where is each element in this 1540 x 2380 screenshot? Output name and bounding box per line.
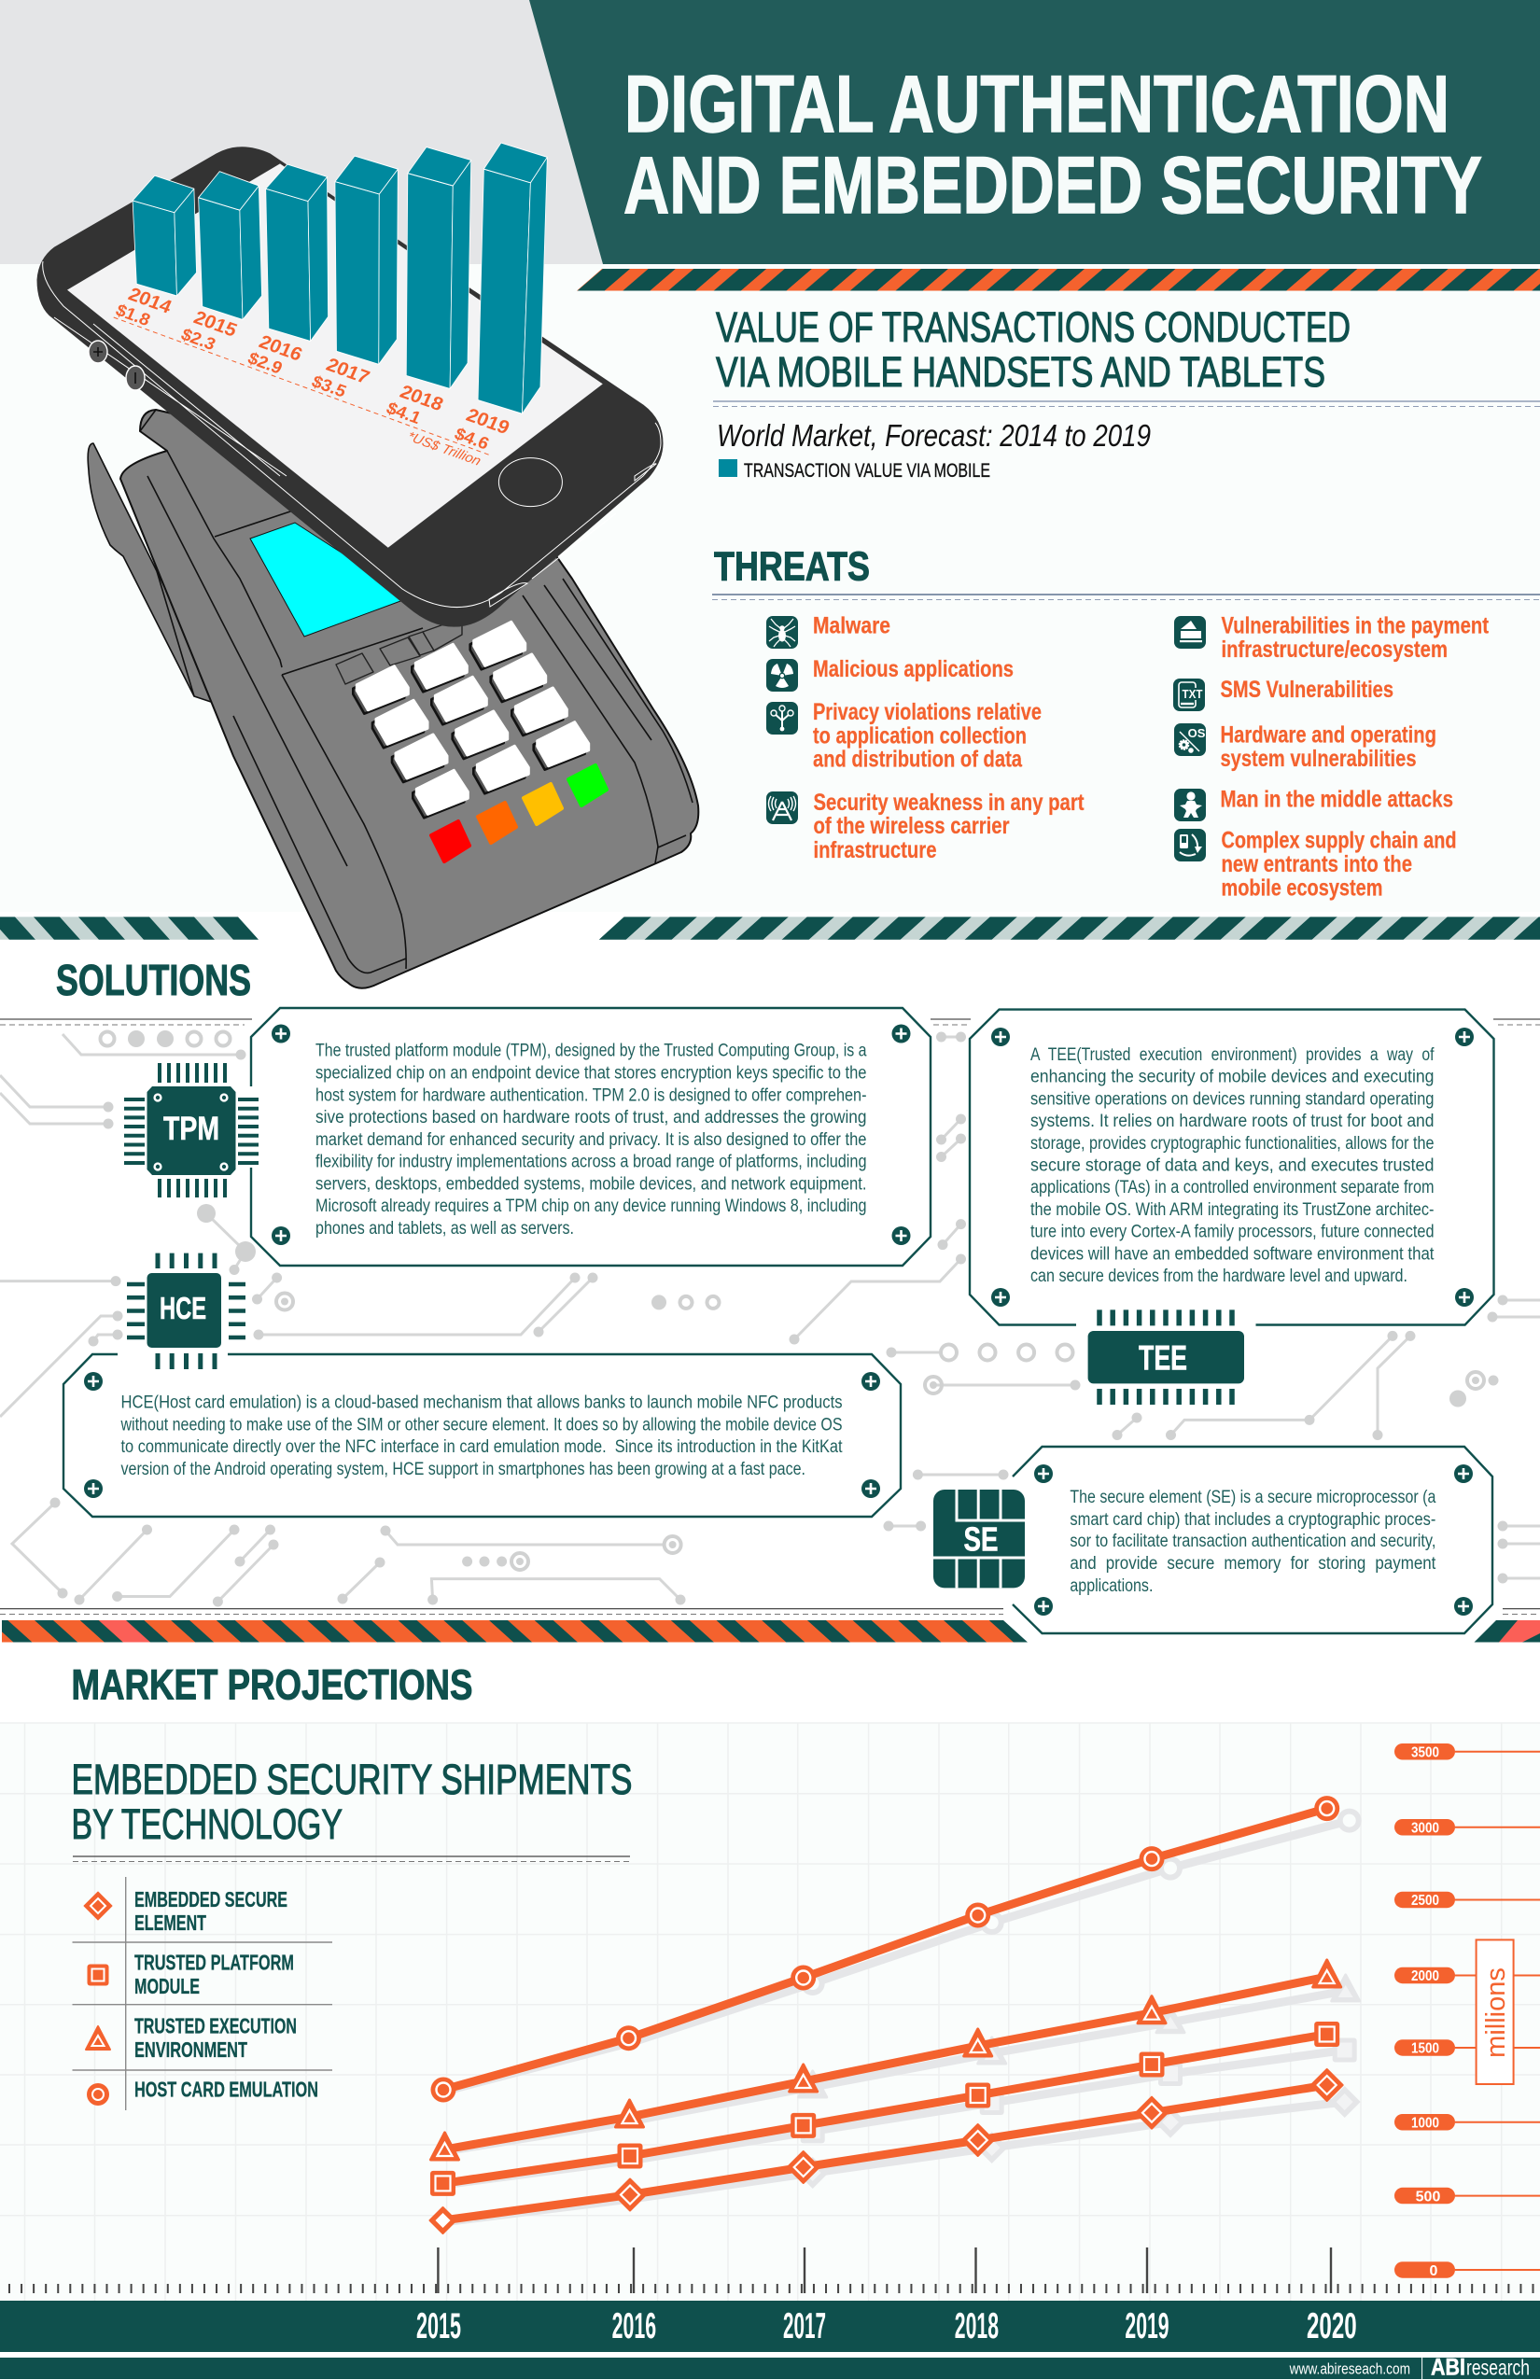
bar chart labels: 2015	[190, 307, 240, 341]
TEE description: enhancing the security of mobile devices and executing	[1030, 1068, 1434, 1086]
TEE description: sensitive operations on devices running standard operating	[1030, 1089, 1434, 1109]
terminal number keys	[353, 622, 589, 818]
y axis labels: 3500	[1411, 1745, 1439, 1760]
TPM description: flexibility for industry implementations across a broad range of platforms, including	[315, 1153, 866, 1172]
y axis labels: 0	[1430, 2263, 1438, 2279]
bar chart labels: 2014	[125, 284, 175, 318]
TEE description	[1030, 1045, 1435, 1286]
legend text: host card emulation: HOST CARD EMULATION	[134, 2078, 318, 2102]
legend icon: diamond	[84, 1892, 112, 1920]
TEE description: applications (TAs) in a controlled environment separate from	[1030, 1178, 1434, 1197]
threat text: SMS: SMS Vulnerabilities	[1221, 677, 1393, 703]
illustration: payment terminal	[88, 410, 698, 988]
bar chart labels: $3.5	[309, 371, 349, 400]
threat text: hardware and OS: Hardware and operating	[1221, 722, 1436, 749]
legend text: embedded secure element: ELEMENT	[134, 1911, 206, 1935]
TEE description: the mobile OS. With ARM integrating its TrustZone architec-	[1030, 1200, 1434, 1220]
y axis labels: 2500	[1411, 1893, 1439, 1909]
y axis unit box: millions	[1481, 1967, 1511, 2058]
chart gridlines	[0, 1723, 1540, 2301]
threat text: payment infrastructure: infrastructure/ecosystem	[1221, 637, 1448, 663]
icon: supply chain	[1174, 829, 1206, 861]
bar chart labels: $1.8	[113, 301, 153, 329]
bar chart labels: 2019	[463, 404, 512, 439]
y axis labels: 3000	[1411, 1820, 1439, 1837]
y axis labels: 2000	[1411, 1968, 1439, 1984]
threat text: wireless carrier	[814, 790, 1085, 863]
header banner with title	[529, 0, 1540, 264]
chart heading: VIA MOBILE HANDSETS AND TABLETS	[716, 348, 1325, 396]
icon: antenna tower	[766, 791, 798, 824]
bar chart labels: 2017	[323, 354, 372, 388]
icon: TEE chip	[1088, 1309, 1244, 1405]
bar chart labels: $4.1	[384, 399, 424, 427]
TEE description: secure storage of data and keys, and executes trusted	[1030, 1155, 1434, 1176]
TPM description	[315, 1042, 867, 1239]
y axis labels	[1394, 1743, 1540, 2279]
series: host card emulation	[431, 1796, 1339, 2102]
y axis labels: 1000	[1411, 2115, 1439, 2132]
bar chart labels: $4.6	[452, 424, 492, 453]
port and speaker details	[489, 464, 656, 607]
illustration: smartphone	[37, 143, 663, 627]
icon: TPM chip	[124, 1063, 259, 1197]
divider stripes above market projections	[2, 1620, 1540, 1643]
threat text: wireless carrier: of the wireless carrier	[814, 813, 1010, 839]
terminal function keys	[336, 618, 462, 684]
footer bar: www.abireseach.com	[1289, 2360, 1410, 2378]
panel: HCE	[63, 1354, 901, 1517]
SE description: and provide secure memory for storing payment	[1070, 1554, 1436, 1574]
volume buttons	[89, 341, 145, 390]
TEE description: storage, provides cryptographic functionalities, allows for the	[1030, 1134, 1434, 1154]
shipments chart heading: BY TECHNOLOGY	[71, 1800, 343, 1848]
chart shadows	[442, 1809, 1362, 2222]
x axis band with years: 2015	[416, 2306, 461, 2346]
icon: SE SIM chip: SE	[963, 1519, 999, 1559]
icon: radiation	[766, 659, 798, 692]
x axis band with years: 2020	[1307, 2306, 1357, 2346]
TPM description: host system for hardware authentication. TPM 2.0 is designed to offer comprehen-	[315, 1085, 866, 1105]
HCE description	[120, 1393, 843, 1479]
TEE description: can secure devices from the hardware level and upward.	[1030, 1267, 1407, 1286]
chart heading	[716, 303, 1351, 396]
panel: TPM	[251, 1008, 931, 1266]
legend text: trusted platform module: MODULE	[134, 1974, 200, 1998]
line chart: shipments	[429, 1796, 1362, 2233]
legend icon: square	[88, 1964, 108, 1986]
circuit board background traces	[0, 1030, 1540, 1607]
chart heading: VALUE OF TRANSACTIONS CONDUCTED	[716, 303, 1351, 351]
bar chart labels: $2.3	[178, 325, 218, 354]
threat text: hardware and OS	[1221, 722, 1436, 772]
TPM description: phones and tablets, as well as servers.	[315, 1219, 574, 1239]
threat text: supply chain	[1221, 827, 1456, 902]
icon: HCE chip	[127, 1253, 245, 1369]
x axis band with years	[0, 2301, 1540, 2352]
y axis labels: 500	[1416, 2189, 1440, 2205]
threat text: privacy violations: Privacy violations relative	[813, 699, 1042, 725]
icon: payment card	[1174, 616, 1206, 649]
header hazard stripe	[577, 269, 1540, 291]
icon: man in the middle	[1174, 789, 1206, 821]
terminal left flap	[88, 443, 222, 706]
SE description	[1070, 1488, 1436, 1596]
footer bar: ABI	[1431, 2354, 1465, 2380]
terminal body	[120, 410, 698, 988]
threats heading: THREATS	[714, 543, 870, 590]
x axis band with years: 2016	[612, 2306, 656, 2346]
series: trusted platform module	[430, 2022, 1339, 2196]
icon: SMS phone	[1173, 679, 1205, 711]
icon: OS and hardware: OS	[1188, 726, 1206, 740]
bar chart labels: *US$ Trillion	[405, 429, 483, 469]
x axis ruler	[8, 2247, 1540, 2293]
legend text: trusted execution environment	[134, 2013, 297, 2062]
threats list left column	[766, 612, 1085, 863]
x axis band with years: 2017	[783, 2306, 826, 2346]
bar chart labels: $2.9	[245, 348, 286, 377]
TPM description: specialized chip on an endpoint device that stores encryption keys specific to the	[315, 1064, 866, 1083]
threat text: privacy violations: and distribution of data	[813, 747, 1023, 773]
threat text: malicious applications: Malicious applications	[813, 656, 1014, 682]
legend text: embedded secure element: EMBEDDED SECURE	[134, 1887, 287, 1911]
HCE description: HCE(Host card emulation) is a cloud-based mechanism that allows banks to launch mobile NFC products	[121, 1393, 842, 1412]
threat text: privacy violations	[813, 699, 1042, 773]
threat text: malware: Malware	[813, 612, 890, 638]
legend text: embedded secure element	[134, 1887, 287, 1935]
TEE description: devices will have an embedded software environment that	[1030, 1245, 1435, 1264]
shipments chart heading	[71, 1756, 633, 1848]
TEE description: systems. It relies on hardware roots of trust for boot and	[1030, 1112, 1434, 1131]
panel: TEE	[970, 1010, 1493, 1325]
chart legend	[719, 459, 990, 482]
chart legend: TRANSACTION VALUE VIA MOBILE	[744, 460, 990, 482]
legend icon: circle	[87, 2083, 109, 2106]
SE description: The secure element (SE) is a secure microprocessor (a	[1070, 1488, 1436, 1507]
footer bar	[0, 2354, 1540, 2380]
HCE description: to communicate directly over the NFC interface in card emulation mode. Since its introduction in the KitKat	[121, 1437, 843, 1457]
TPM description: market demand for enhanced security and privacy. It is also designed to offer the	[315, 1130, 866, 1150]
phone body	[37, 147, 663, 627]
divider stripes above solutions	[0, 917, 1540, 940]
terminal detail lines	[140, 410, 693, 973]
icon: OS and hardware	[1174, 723, 1206, 756]
y axis labels: 1500	[1411, 2041, 1439, 2057]
legend icon: triangle	[86, 2026, 110, 2050]
panel: SE	[1013, 1447, 1492, 1633]
icon: spider	[766, 616, 798, 649]
TPM description: servers, desktops, embedded systems, mobile devices, and network equipment.	[315, 1174, 866, 1194]
TPM description: sive protections based on hardware roots of trust, and addresses the growing	[315, 1108, 866, 1127]
terminal coloured keys	[431, 765, 607, 861]
legend text: trusted platform module: TRUSTED PLATFORM	[134, 1951, 294, 1975]
terminal display	[250, 523, 411, 637]
legend text: trusted platform module	[134, 1951, 294, 1998]
phone screen	[67, 163, 603, 548]
icon: SMS phone: TXT	[1182, 687, 1203, 701]
threat text: wireless carrier: infrastructure	[814, 837, 937, 863]
threat text: supply chain: Complex supply chain and	[1221, 827, 1456, 853]
icon: SE SIM chip	[933, 1490, 1025, 1588]
SE description: smart card chip) that includes a cryptographic proces-	[1070, 1510, 1435, 1530]
TEE description: ture into every Cortex-A family processors, future connected	[1030, 1223, 1434, 1242]
bar chart labels: 2018	[397, 381, 446, 415]
x axis band with years: 2018	[955, 2306, 999, 2346]
icon: TEE chip: TEE	[1139, 1339, 1187, 1378]
threat text: supply chain: mobile ecosystem	[1221, 875, 1383, 902]
threat text: wireless carrier: Security weakness in any part	[814, 790, 1085, 816]
legend: technologies	[73, 1877, 332, 2110]
threat text: payment infrastructure	[1221, 612, 1490, 663]
icon: TPM chip: TPM	[163, 1111, 219, 1147]
TPM description: The trusted platform module (TPM), designed by the Trusted Computing Group, is a	[315, 1042, 867, 1061]
legend text: trusted execution environment: ENVIRONMENT	[134, 2037, 247, 2062]
series: trusted execution environment	[431, 1960, 1341, 2160]
bar chart labels	[113, 284, 512, 469]
threat text: man in the middle: Man in the middle attacks	[1221, 786, 1453, 812]
HCE description: without needing to make use of the SIM or other secure element. It does so by allowing the mobile device OS	[120, 1415, 843, 1435]
bar chart labels: 2016	[256, 331, 305, 365]
icon: branching data	[766, 702, 798, 735]
legend text: trusted execution environment: TRUSTED EXECUTION	[134, 2013, 297, 2037]
SE description: applications.	[1070, 1576, 1153, 1596]
home button	[498, 458, 562, 507]
threat text: supply chain: new entrants into the	[1221, 851, 1412, 877]
threats list right column	[1173, 612, 1490, 902]
TPM description: Microsoft already requires a TPM chip on any device running Windows 8, including	[315, 1197, 866, 1216]
phone edge highlights	[43, 261, 661, 608]
HCE description: version of the Android operating system, HCE support in smartphones has been growing at a fast pace.	[121, 1460, 805, 1479]
series: embedded secure element	[429, 2069, 1343, 2233]
solutions heading: SOLUTIONS	[56, 956, 251, 1004]
icon: HCE chip: HCE	[160, 1291, 206, 1325]
x axis band with years: 2019	[1125, 2306, 1169, 2346]
SE description: sor to facilitate transaction authentication and security,	[1070, 1532, 1435, 1551]
threat text: hardware and OS: system vulnerabilities	[1221, 746, 1417, 772]
TEE description: A TEE(Trusted execution environment) provides a way of	[1030, 1045, 1435, 1065]
y axis unit box	[1477, 1939, 1514, 2084]
shipments chart heading: EMBEDDED SECURITY SHIPMENTS	[71, 1756, 633, 1803]
threat text: privacy violations: to application collection	[813, 722, 1027, 749]
bar chart on phone screen	[133, 143, 547, 413]
market projections heading: MARKET PROJECTIONS	[71, 1661, 472, 1709]
chart subtitle: World Market, Forecast: 2014 to 2019	[717, 418, 1151, 453]
